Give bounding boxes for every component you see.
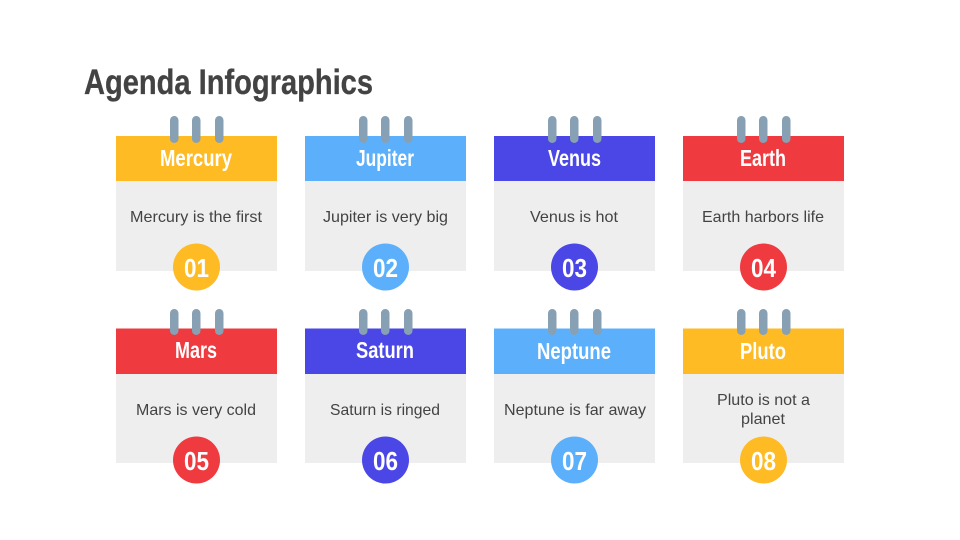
card: Pluto: planet: [741, 411, 786, 428]
card: Neptune: Neptune is far away: [504, 402, 646, 419]
card: Jupiter: Jupiter: [356, 145, 414, 171]
card: Saturn: Saturn is ringed: [330, 402, 440, 419]
card: Mercury: Mercury: [160, 145, 232, 171]
card: Venus: 03: [562, 253, 587, 283]
card: Saturn: [305, 309, 466, 484]
card: Pluto: 08: [751, 446, 776, 476]
card: Neptune: Neptune: [537, 338, 611, 364]
card: Earth: Earth: [740, 145, 786, 171]
card: Venus: Venus is hot: [530, 209, 619, 226]
card: Jupiter: [305, 116, 466, 290]
card: Earth: [683, 116, 844, 290]
card: Mercury: [116, 116, 277, 290]
card: Mars: Mars is very cold: [136, 402, 256, 419]
card: Saturn: 06: [373, 446, 398, 476]
card: Earth: 04: [751, 253, 776, 283]
card: Pluto: Pluto is not a: [717, 392, 810, 409]
card: Pluto: Pluto: [740, 338, 786, 364]
card: Venus: [494, 116, 655, 290]
card: Mars: 05: [184, 446, 209, 476]
card: Neptune: [494, 309, 655, 484]
card: Neptune: 07: [562, 446, 587, 476]
card: Saturn: Saturn: [356, 337, 414, 363]
card: Mars: Mars: [175, 337, 217, 363]
card: Earth: Earth harbors life: [702, 209, 824, 226]
card: Mercury: Mercury is the first: [130, 209, 263, 226]
card: Venus: Venus: [548, 145, 601, 171]
card: Mercury: 01: [184, 253, 209, 283]
card: Jupiter: Jupiter is very big: [323, 209, 448, 226]
title: Agenda Infographics: [84, 63, 373, 102]
card: Pluto: [683, 309, 844, 484]
card: Mars: [116, 309, 277, 484]
card: Jupiter: 02: [373, 253, 398, 283]
